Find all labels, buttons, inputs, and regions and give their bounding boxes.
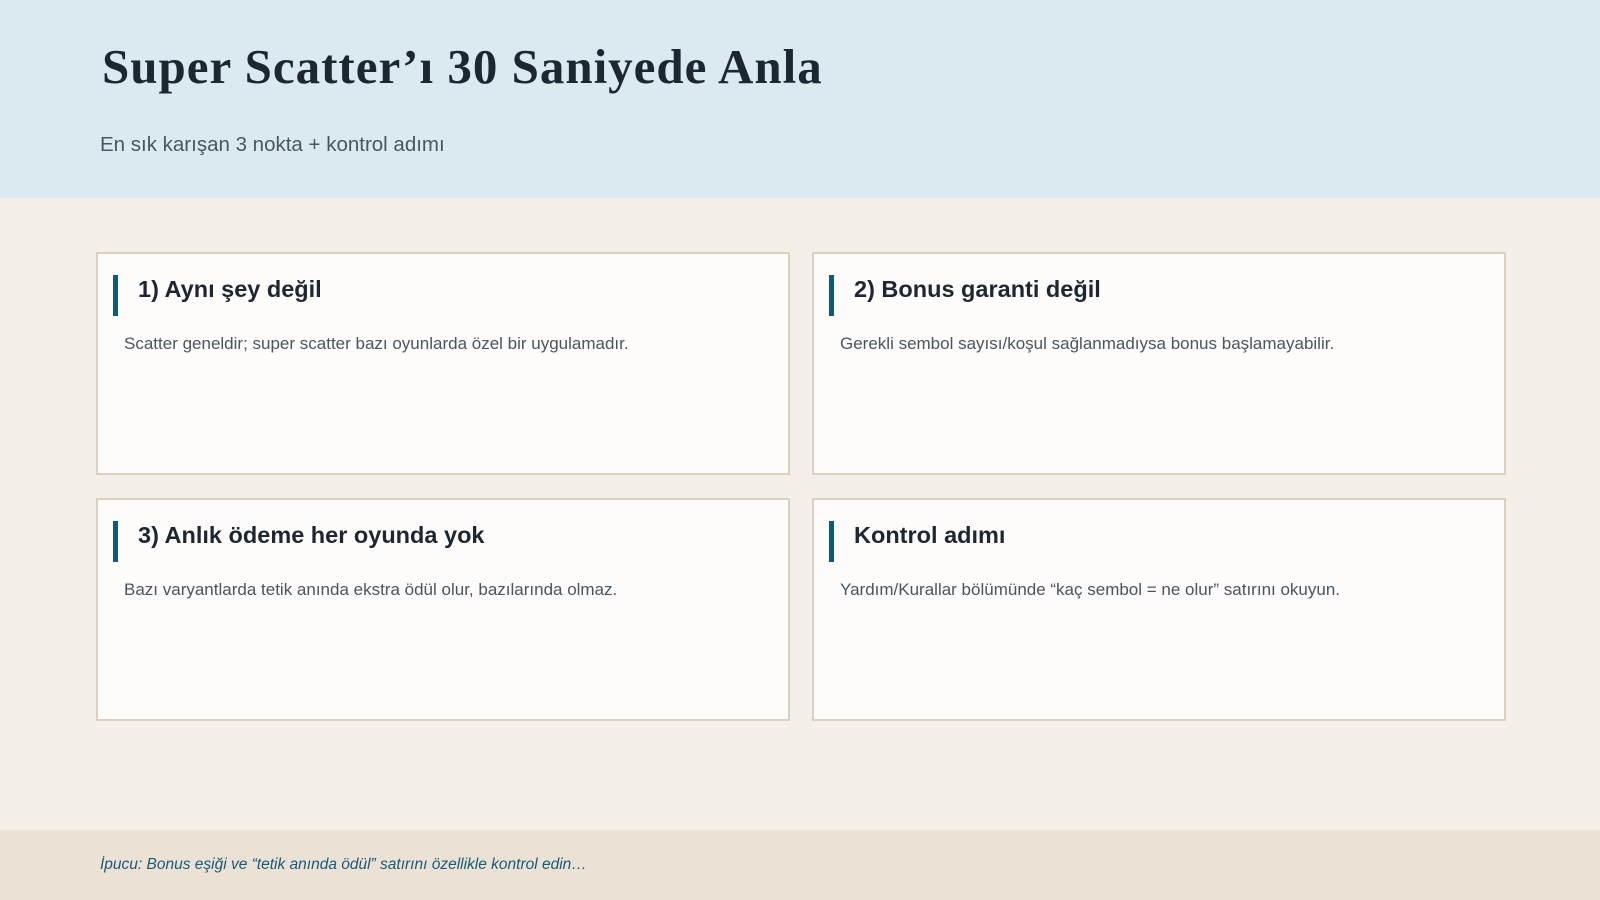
text: Gerekli sembol sayısı/koşul sağlanmadıysa bonus başlamayabilir. [840,334,1334,353]
panel: kontrol [812,498,1506,721]
subtitle: En sık karışan 3 nokta + kontrol adımı [100,133,445,156]
heading: 2) Bonus garanti değil [854,276,1101,302]
text: Bazı varyantlarda tetik anında ekstra ödül olur, bazılarında olmaz. [124,580,617,599]
panel: 1 [96,252,790,475]
footer band [0,830,1600,900]
header band [0,0,1600,198]
accent bar [113,521,118,562]
heading: Kontrol adımı [854,522,1005,548]
accent bar [113,275,118,316]
heading: 3) Anlık ödeme her oyunda yok [138,522,484,548]
text: Yardım/Kurallar bölümünde “kaç sembol = ne olur” satırını okuyun. [840,580,1340,599]
footer tip: İpucu: Bonus eşiği ve “tetik anında ödül” satırını özellikle kontrol edin… [100,856,587,873]
panel: 2 [812,252,1506,475]
heading: 1) Aynı şey değil [138,276,322,302]
title: Super Scatter’ı 30 Saniyede Anla [102,39,823,94]
accent bar [829,521,834,562]
accent bar [829,275,834,316]
panel: 3 [96,498,790,721]
text: Scatter geneldir; super scatter bazı oyunlarda özel bir uygulamadır. [124,334,629,353]
